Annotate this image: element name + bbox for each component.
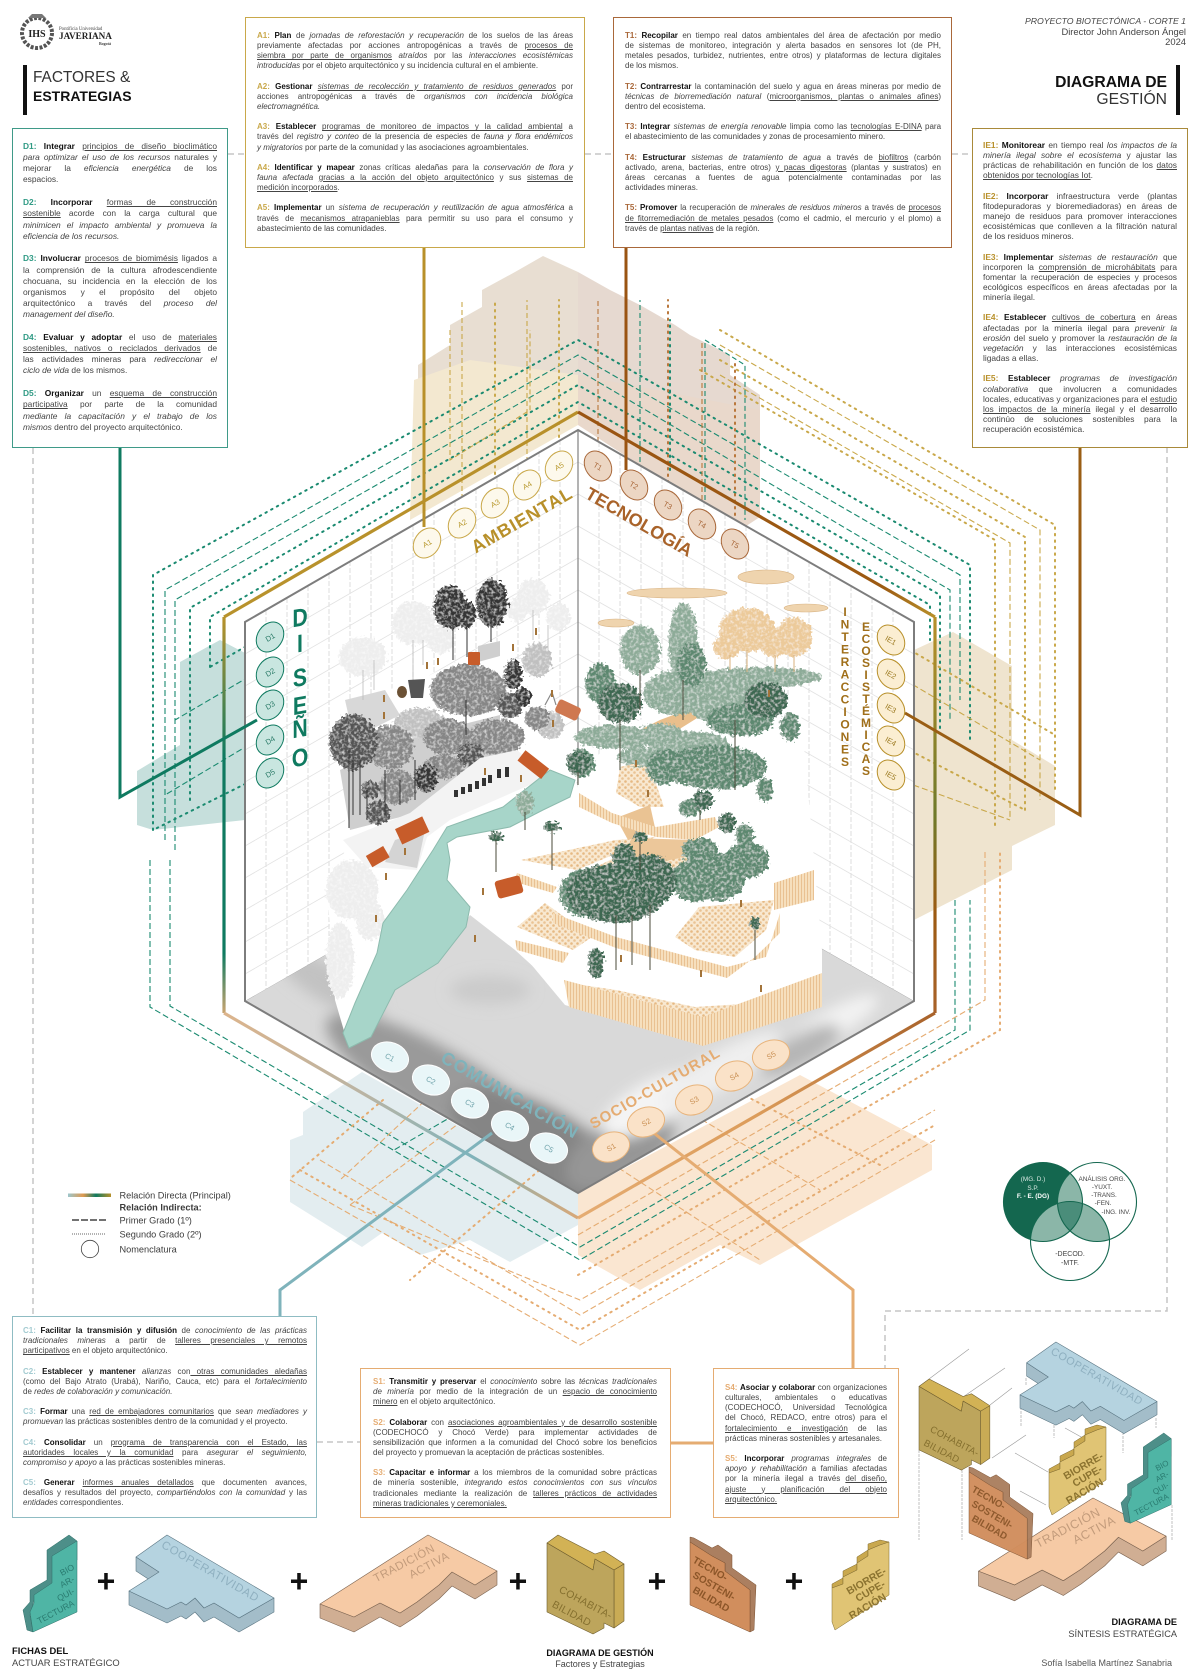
nomenclature nodes: diseño (251, 617, 289, 793)
nomenclature nodes: ambiental: A4 (521, 479, 533, 492)
strategic pieces row: bio-arquitectura: AR- (58, 1574, 76, 1590)
project header: PROYECTO BIOTECTÓNICA - CORTE 1 (1025, 16, 1186, 26)
venn diagram: -MTF. (1061, 1260, 1079, 1267)
text: T1 to T5: metales pesados, turbidez, nutrientes, entre otros) y plataformas de lectura digitales (625, 51, 941, 60)
nomenclature nodes: interacciones ecosistémicas: IE2 (884, 668, 898, 681)
heading: factores y estrategias: ESTRATEGIAS (33, 88, 132, 104)
nomenclature nodes: tecnología: T1 (592, 460, 604, 473)
strategic pieces row: biorrecuperación: CUPE- (854, 1579, 888, 1605)
text: T1 to T5: través de plantas nativas de la región. (625, 224, 760, 233)
text: A1 to A5 (256, 31, 574, 233)
text: D1 to D5: D5: Organizar un esquema de construcción (23, 388, 217, 398)
nomenclature nodes: comunicación: C1 (383, 1051, 396, 1064)
text: D1 to D5: las actividades mineras para redireccionar el (23, 354, 217, 364)
plus sign: + (509, 1563, 527, 1599)
panel: ambiental strategies (245, 17, 585, 248)
panel: diseño strategies (12, 128, 228, 448)
text: IE1 to IE5: IE1: Monitorear en tiempo real los impactos de la (983, 140, 1177, 150)
synthesis diagram: cohabitabilidad (919, 1379, 990, 1470)
text: C1 to C5: desafíos y resultados del proyecto, compartiéndolos con la comunidad y las (23, 1488, 307, 1497)
text: A1 to A5: A2: Gestionar sistemas de recolección y tratamiento de residuos generados por (257, 82, 573, 91)
text: A1 to A5: siembra por parte de organismos atraídos por las interacciones ecosistémicas (257, 51, 573, 60)
text: IE1 to IE5: manejo de residuos para promover interacciones (983, 211, 1177, 221)
factor label: diseño: D (292, 602, 308, 633)
panel: socio-cultural strategies S1 to S3 (360, 1368, 671, 1518)
factor label: diseño: O (292, 742, 308, 773)
factor label: diseño: E (293, 690, 307, 721)
synthesis diagram: tradición activa: ACTIVA (1070, 1513, 1118, 1547)
nomenclature nodes: diseño: D3 (264, 699, 277, 712)
text: S1 to S3 (373, 1377, 657, 1508)
text: D1 to D5: chocuana, su incidencia en la elección de los (23, 276, 217, 286)
nomenclature nodes: tecnología: T4 (696, 518, 708, 531)
project header (1025, 16, 1186, 47)
factor label: comunicación: COMUNICACIÓN (437, 1046, 583, 1143)
heading: diagrama de gestión (1040, 65, 1180, 115)
text: D1 to D5: para optimizar el uso de los recursos naturales y (23, 152, 217, 162)
text: T1 to T5: el abastecimiento de las comunidades y zonas de procesamiento minero. (625, 132, 885, 141)
synthesis diagram: tecnosostenibilidad: SOSTENI- (969, 1499, 1015, 1531)
outer hexagon: coloured factor frame (224, 412, 935, 1218)
text: D1 to D5: sostenible acorde con la carga cultural que (23, 208, 217, 218)
strategic pieces row: cooperatividad: COOPERATIVIDAD (159, 1539, 261, 1605)
text: IE1 to IE5: continúo de soluciones sostenibles para la (983, 414, 1177, 424)
text: T1 to T5: técnicas de biorremediación natural (microorganismos, plantas o animales afines) (625, 92, 941, 101)
floor: aerial landscape photo (246, 915, 913, 1192)
illustration: green forest (489, 603, 822, 978)
text: S1 to S3: (CODECHOCÓ y Chocó Verde) para implementar actividades de (373, 1428, 657, 1437)
nomenclature nodes: diseño: D1 (264, 631, 277, 644)
text: D1 to D5: ciclo de vida de los mismos. (23, 365, 127, 375)
nomenclature nodes: comunicación: C3 (463, 1097, 476, 1110)
caption: diagrama de síntesis estratégica: SÍNTESIS ESTRATÉGICA (1068, 1629, 1177, 1639)
factor label: socio-cultural: SOCIO-CULTURAL (587, 1044, 724, 1133)
venn diagram: -DECOD. (1055, 1251, 1085, 1258)
text: C1 to C5: C4: Consolidar un programa de transparencia con el Estado, las (23, 1438, 307, 1447)
factor label: ecosistémicas: ECOSISTÉMICAS (861, 620, 871, 778)
text: S4 and S5: fortalecimiento e investigación de las (725, 1424, 887, 1433)
text: C1 to C5: participativos en el objeto arquitectónico. (23, 1346, 168, 1355)
text: S4 and S5: arquitectónico. (725, 1495, 777, 1504)
text: IE1 to IE5: obtenidos por tecnologías Iot. (983, 170, 1093, 180)
caption: diagrama de síntesis estratégica: DIAGRAMA DE (1111, 1617, 1177, 1627)
venn diagram: ANÁLISIS ORG. (1079, 1174, 1126, 1183)
text: D1 to D5: la comprensión de la cultura afrodescendiente (23, 265, 217, 275)
text: IE1 to IE5: fitodepuradoras y bioremediadoras) en áreas de (983, 201, 1177, 211)
text: A1 to A5: electromagnética. (257, 102, 320, 111)
synthesis diagram: cohabitabilidad: BILIDAD (922, 1438, 961, 1466)
text: A1 to A5: A4: Identificar y mapear zonas críticas aledañas para la conservación de flora y (257, 163, 573, 172)
text: IE1 to IE5: IE4: Establecer cultivos de cobertura en áreas (983, 312, 1177, 322)
text: S4 and S5: S4: Asociar y colaborar con organizaciones (725, 1383, 887, 1392)
illustration: right terraces (515, 703, 822, 1046)
strategic pieces row: cohabitabilidad (547, 1535, 624, 1634)
text: IE1 to IE5: locales, educativas y organizaciones para el estudio (983, 394, 1177, 404)
factor label: interacciones: INTERACCIONES (840, 605, 850, 769)
factor label: diseño: S (293, 662, 307, 693)
nomenclature nodes: ambiental (408, 446, 578, 563)
synthesis diagram: tecnosostenibilidad: BILIDAD (969, 1513, 1009, 1543)
plus sign: + (648, 1563, 666, 1599)
text: T1 to T5: actividades mineras. (625, 183, 698, 192)
text: IE1 to IE5: ligadas a ellas. (983, 353, 1038, 363)
text: T1 to T5: T4: Estructurar sistemas de tratamiento de agua a través de biofiltros (carbón (625, 153, 941, 162)
text: A1 to A5: acciones antropogénicas a través de organismos con incidencia biológica (257, 92, 573, 101)
text: T1 to T5: T2: Contrarrestar la contaminación del suelo y agua en áreas mineras por medio de (625, 82, 941, 91)
venn diagram: F. - E. (DG) (1017, 1193, 1049, 1200)
heading: diagrama de gestión: GESTIÓN (1096, 91, 1167, 108)
logo: Pontificia Universidad Javeriana: Pontificia Universidad (59, 27, 103, 32)
legend: Segundo Grado (2º) (120, 1230, 202, 1240)
venn diagram: -FEN. (1095, 1200, 1112, 1207)
credit: author: Sofía Isabella Martínez Sanabria (1041, 1658, 1172, 1668)
caption: diagrama de gestión: Factores y Estrategias (555, 1659, 645, 1669)
text: IE1 to IE5: incorporen la comprensión de microhábitats para (983, 262, 1177, 272)
text: T1 to T5: de fitorremediación de metales pesados (como el cadmio, el mercurio y el plomo) a (625, 214, 941, 223)
nomenclature nodes: interacciones ecosistémicas: IE1 (884, 634, 898, 647)
text: S1 to S3: sensibilización que informen a la comunidad del Chocó sobre los beneficios (373, 1438, 657, 1447)
strategic pieces row: cohabitabilidad: BILIDAD (550, 1599, 593, 1629)
illustration: white ground under the landscape (328, 650, 822, 1048)
text: S1 to S3: del proyecto y promuevan la aceptación de prácticas sostenibles. (373, 1448, 604, 1457)
venn diagram: S.P. (1027, 1185, 1039, 1192)
nomenclature nodes: socio-cultural: S1 (605, 1141, 617, 1154)
caption: diagrama de gestión: DIAGRAMA DE GESTIÓN (546, 1648, 654, 1658)
text: T1 to T5: activado, arena, bacterias, entre otros) y pacas digestoras (plantas y sustratos) en (625, 163, 941, 172)
legend: Nomenclatura (120, 1244, 178, 1254)
strategic pieces row: bio-arquitectura: QUI- (55, 1586, 76, 1603)
nomenclature nodes: interacciones ecosistémicas: IE4 (884, 735, 898, 748)
text: S1 to S3: de minería por medio de la integración de un espacio de conocimiento (373, 1387, 657, 1396)
panel: interacciones ecosistémicas strategies (972, 128, 1188, 448)
text: S1 to S3: de minería sostenible, integrando estos conocimientos con sus vínculos (373, 1478, 657, 1487)
isometric room: walls and grid (245, 430, 914, 1193)
text: T1 to T5: de los mismos. (625, 61, 678, 70)
text: A1 to A5: A1: Plan de jornadas de reforestación y recuperación de los suelos de las áreas (257, 31, 573, 40)
text: IE1 to IE5: minería ilegal sobre el ecosistema y ajustar las (983, 150, 1177, 160)
synthesis diagram: biorrecuperación: CUPE- (1071, 1464, 1105, 1490)
factor label: diseño (292, 602, 308, 773)
synthesis diagram: cooperatividad: COOPERATIVIDAD (1048, 1346, 1145, 1408)
text: C1 to C5: tradicionales mineras a partir de talleres presenciales y remotos (23, 1336, 307, 1345)
direct relation connectors (120, 247, 1080, 1443)
nomenclature nodes: interacciones ecosistémicas: IE5 (884, 769, 898, 782)
strategic pieces row: bio-arquitectura: TECTURA (35, 1598, 76, 1626)
factor label: ambiental: AMBIENTAL (468, 483, 576, 557)
strategic pieces row: cooperatividad (129, 1535, 274, 1632)
text: D1 to D5: arquitectónico a través del proceso del (23, 298, 217, 308)
panel: tecnología strategies (613, 17, 952, 248)
text: IE1 to IE5: IE2: Incorporar infraestructura verde (plantas (983, 191, 1177, 201)
volume: socio-cultural extrusion (578, 1075, 932, 1290)
nomenclature nodes: tecnología: T3 (662, 499, 674, 512)
text: A1 to A5: y migratorios por parte de la comunidad y las asociaciones agroambientales. (257, 143, 529, 152)
strategic pieces row: tradición activa: TRADICIÓN (371, 1542, 437, 1585)
illustration: teal river (343, 770, 575, 1048)
nomenclature nodes: interacciones ecosistémicas: IE3 (884, 702, 898, 715)
synthesis diagram: bio-arquitectura: QUI- (1151, 1481, 1171, 1497)
text: S1 to S3: S3: Capacitar e informar a los miembros de la comunidad sobre prácticas (373, 1468, 657, 1477)
text: A1 to A5: introducidas por el objeto arquitectónico y su incidencia cultural en el ambiente. (257, 61, 538, 70)
nomenclature nodes: comunicación: C5 (542, 1142, 555, 1155)
nomenclature nodes: socio-cultural: S2 (640, 1116, 652, 1129)
synthesis diagram: tecnosostenibilidad (969, 1467, 1033, 1559)
text: C1 to C5 (22, 1326, 308, 1507)
nomenclature nodes: comunicación: C4 (503, 1120, 516, 1133)
text: D1 to D5: minimicen el impacto ambiental y promueva la (23, 220, 217, 230)
caption: diagrama de gestión (546, 1648, 654, 1669)
heading: diagrama de gestión: DIAGRAMA DE (1055, 74, 1167, 91)
text: C1 to C5: C5: Generar informes anuales detallados que documenten avances, (23, 1478, 307, 1487)
volumes: ambiental and tecnología extrusions (410, 256, 760, 530)
logo: Pontificia Universidad Javeriana: JAVERIANA (59, 31, 112, 41)
text: D1 to D5: participativa por parte de la comunidad (23, 399, 217, 409)
indirect relation lines: first and second degree (33, 154, 1167, 1443)
text: D1 to D5: D2: Incorporar formas de construcción (23, 197, 217, 207)
project header: 2024 (1165, 36, 1186, 47)
text: S1 to S3: mineras tradicionales y ceremoniales. (373, 1499, 507, 1508)
text: IE1 to IE5: IE3: Implementar sistemas de restauración que (983, 252, 1177, 262)
plus sign: + (785, 1563, 803, 1599)
strategic pieces row: bio-arquitectura: BIO (58, 1562, 76, 1578)
text: D1 to D5: mismos dentro del proyecto arquitectónico. (23, 422, 183, 432)
nomenclature nodes: ambiental: A1 (421, 537, 433, 550)
venn diagram: (MG. D.) (1021, 1176, 1045, 1183)
illustration: mining machinery (366, 652, 582, 899)
logo: Pontificia Universidad Javeriana (22, 14, 112, 48)
text: IE1 to IE5: IE5: Establecer programas de investigación (983, 373, 1177, 383)
text: D1 to D5: D3: Involucrar procesos de biomimésis ligados a (23, 253, 217, 263)
heading: factores y estrategias (23, 65, 143, 115)
project header: Director John Anderson Ángel (1061, 26, 1186, 37)
legend (68, 1190, 231, 1258)
text: S4 and S5: apoyo y rehabilitación a familias afectadas (725, 1464, 887, 1473)
text: T1 to T5: T5: Promover la recuperación de minerales de residuos mineros a través de procesos (625, 203, 941, 212)
text: D1 to D5 (22, 141, 218, 432)
nomenclature nodes: tecnología: T5 (729, 538, 741, 551)
strategic pieces row: tecnosostenibilidad (690, 1537, 756, 1632)
text: S1 to S3: minero en el objeto arquitectónico. (373, 1397, 495, 1406)
text: T1 to T5: de sistemas de monitoreo, integración y alerta basados en sensores Iot (de PH, (625, 41, 941, 50)
text: S1 to S3: S1: Transmitir y preservar el conocimiento sobre las técnicas tradicionales (373, 1377, 657, 1386)
venn diagram: -TRANS. (1091, 1192, 1117, 1199)
text: D1 to D5: D4: Evaluar y adoptar el uso de materiales (23, 332, 217, 342)
text: A1 to A5: medición incorporados. (257, 183, 340, 192)
synthesis diagram: tradición activa: TRADICIÓN (1032, 1504, 1103, 1551)
caption: fichas del actuar estratégico (12, 1645, 120, 1668)
text: T1 to T5: áreas cercanas a fuentes de agua potencialmente contaminadas por las (625, 173, 941, 182)
text: T1 to T5: T3: Integrar sistemas de energía renovable limpia como las tecnologías E-DINA para (625, 122, 941, 131)
text: A1 to A5: través de mecanismos atrapanieblas para permitir su uso para el consumo y (257, 214, 573, 223)
volume: interacciones extrusion (914, 632, 1055, 920)
synthesis diagram: bio-arquitectura: BIO (1154, 1458, 1170, 1473)
text: IE1 to IE5: ecosistémicas que conlleven a la filtración natural (983, 221, 1177, 231)
text: C1 to C5: compromiso y apoyo a las prácticas sostenibles mineras. (23, 1458, 225, 1467)
strategic pieces row: tradición activa (320, 1535, 497, 1632)
nomenclature nodes: tecnología (579, 446, 754, 564)
text: A1 to A5: través del registro y conteo de la presencia de especies de fauna y flora endémicos (257, 132, 573, 141)
text: C1 to C5: promuevan las prácticas sostenibles dentro de la comunidad y el proyecto. (23, 1417, 288, 1426)
nomenclature nodes: socio-cultural: S5 (765, 1049, 777, 1062)
text: IE1 to IE5: los impactos de la minería ilegal y el desarrollo (983, 404, 1177, 414)
strategic pieces row: cohabitabilidad: COHABITA- (557, 1585, 614, 1622)
synthesis diagram: bio-arquitectura: AR- (1154, 1469, 1171, 1484)
text: S4 and S5: del Chocó, REDACO, entre otros) para el (725, 1413, 887, 1422)
volume: comunicación extrusion (290, 1072, 578, 1262)
text: D1 to D5: mejorar la eficiencia energética de los (23, 163, 217, 173)
text: D1 to D5: espacios. (23, 174, 58, 184)
factor label: diseño: I (297, 629, 303, 658)
text: S1 to S3: tradicionales mediante la realización de talleres prácticos de actividades (373, 1489, 657, 1498)
venn diagram: -YUXT. (1092, 1184, 1112, 1191)
nomenclature nodes: comunicación (367, 1037, 572, 1168)
text: C1 to C5: de redes de colaboración y comunicación. (23, 1387, 172, 1396)
text: C1 to C5: (como del Bajo Atrato (Urabá), Nariño, Cauca, etc) para el fortalecimiento (23, 1377, 307, 1386)
text: S1 to S3: S2: Colaborar con asociaciones agroambientales y de desarrollo sostenible (373, 1418, 657, 1427)
illustration: peach trees and clouds (598, 570, 828, 672)
strategic pieces row: biorrecuperación: BIORRE- (845, 1566, 889, 1598)
text: A1 to A5: abastecimiento de las comunidades. (257, 224, 386, 233)
text: IE1 to IE5: de los residuos mineros. (983, 231, 1074, 241)
synthesis diagram: bio-arquitectura: TECTURA (1133, 1492, 1171, 1518)
text: A1 to A5: A3: Establecer programas de monitoreo de impactos y la calidad ambiental a (257, 122, 573, 131)
strategic pieces row: tecnosostenibilidad: SOSTENI- (690, 1570, 737, 1603)
logo: Pontificia Universidad Javeriana: IHS (28, 29, 46, 40)
venn diagram: -ING. INV. (1102, 1209, 1131, 1216)
text: IE1 to IE5: prácticas de rehabilitación en función de los datos (983, 160, 1177, 170)
nomenclature nodes: socio-cultural: S3 (688, 1094, 700, 1107)
text: S4 and S5: ajuste y planificación del objeto (725, 1484, 887, 1494)
text: A1 to A5: A5: Implementar un sistema de recuperación y reutilización de agua atmosférica a (257, 203, 573, 212)
text: D1 to D5: D1: Integrar principios de diseño bioclimático (23, 141, 217, 151)
text: IE1 to IE5: afectadas por la minería ilegal para prevenir la (983, 323, 1177, 333)
caption: diagrama de síntesis estratégica (1068, 1617, 1177, 1639)
text: IE1 to IE5: vegetación y las interacciones ecosistémicas (983, 343, 1177, 353)
nomenclature nodes: interacciones ecosistémicas (872, 620, 910, 795)
nomenclature nodes: diseño: D4 (264, 734, 277, 747)
text: IE1 to IE5: minería ilegal. (983, 292, 1035, 302)
plus sign: + (290, 1563, 308, 1599)
synthesis diagram: bio-arquitectura (1121, 1433, 1171, 1523)
text: T1 to T5: T1: Recopilar en tiempo real datos ambientales del área de afectación por medio (625, 31, 941, 40)
text: IE1 to IE5: colaborativa que involucren a comunidades (983, 384, 1177, 394)
synthesis diagram: biorrecuperación: BIORRE- (1062, 1451, 1106, 1483)
text: S4 and S5 (725, 1383, 887, 1504)
legend: Relación Directa (Principal) (120, 1190, 231, 1200)
text: D1 to D5: management del diseño. (23, 309, 115, 319)
synthesis diagram: tradición activa (979, 1498, 1166, 1601)
panel: comunicación strategies (12, 1316, 317, 1518)
panel: socio-cultural strategies S4 and S5 (713, 1368, 899, 1518)
text: D1 to D5: organismos y el propósito del objeto (23, 287, 217, 297)
text: A1 to A5: fauna afectada gracias a la acción del objeto arquitectónico y sus sistemas de (257, 173, 573, 182)
text: T1 to T5: dentro del ecosistema. (625, 102, 706, 111)
text: S4 and S5: (CODECHOCÓ, Universidad Tecnológica (725, 1403, 887, 1412)
strategic pieces row: biorrecuperación: RACIÓN (847, 1590, 888, 1622)
synthesis diagram: cooperatividad (1020, 1342, 1157, 1434)
nomenclature nodes: ambiental: A2 (456, 517, 468, 530)
illustration: left hillside with grey forest (326, 579, 570, 998)
synthesis diagram: biorrecuperación: RACIÓN (1064, 1475, 1106, 1507)
legend: Primer Grado (1º) (120, 1216, 192, 1226)
nomenclature nodes: ambiental: A3 (489, 497, 501, 510)
synthesis diagram: cohabitabilidad: COHABITA- (928, 1424, 981, 1459)
strategic pieces row: tradición activa: ACTIVA (407, 1550, 452, 1581)
synthesis diagram: biorrecuperación (1049, 1425, 1106, 1515)
text: A1 to A5: previamente afectadas por acciones antropogénicas a través de procesos de (257, 41, 573, 50)
strategic pieces row: tecnosostenibilidad: TECNO- (690, 1555, 729, 1584)
text: C1 to C5: C3: Formar una red de embajadores comunitarios que sean mediadores y (23, 1407, 307, 1416)
text: S4 and S5: por la minería ilegal a través del diseño, (725, 1474, 887, 1483)
text: C1 to C5: C2: Establecer y mantener alianzas con otras comunidades aledañas (23, 1367, 307, 1376)
text: C1 to C5: autoridades locales y la comunidad para asegurar el seguimiento, (23, 1448, 307, 1457)
factor label: tecnología: TECNOLOGÍA (582, 482, 696, 561)
nomenclature nodes: socio-cultural (588, 1035, 794, 1167)
text: T1 to T5 (625, 31, 942, 233)
factor label: diseño: Ñ (292, 712, 308, 744)
text: S4 and S5: prácticas mineras sostenibles y artesanales. (725, 1434, 882, 1443)
text: D1 to D5: sostenibles, nativos o reciclados derivados de (23, 343, 217, 353)
text: S4 and S5: S5: Incorporar programas integrales de (725, 1454, 887, 1463)
text: C1 to C5: C1: Facilitar la transmisión y difusión de conocimiento de las prácticas (23, 1326, 307, 1335)
nomenclature nodes: tecnología: T2 (628, 479, 640, 492)
synthesis guide lines (919, 1349, 1172, 1540)
nomenclature nodes: diseño: D2 (264, 666, 277, 679)
caption: fichas del actuar estratégico: ACTUAR ESTRATÉGICO (12, 1657, 120, 1668)
text: IE1 to IE5: fomentar la recuperación de especies y procesos (983, 272, 1177, 282)
venn diagram (1004, 1162, 1136, 1280)
nomenclature nodes: diseño: D5 (264, 767, 277, 780)
text: IE1 to IE5: erosión del suelo y promover la restauración de la (983, 333, 1177, 343)
site workers (375, 628, 770, 992)
strategic pieces row: biorrecuperación (832, 1540, 889, 1630)
text: IE1 to IE5: ecológicos específicos en áreas afectadas por la (983, 282, 1177, 292)
strategic pieces row: bio-arquitectura (23, 1535, 77, 1632)
text: S4 and S5: culturales, ambientales o educativas (725, 1393, 887, 1402)
nomenclature nodes: ambiental: A5 (553, 460, 565, 473)
nomenclature nodes: socio-cultural: S4 (728, 1070, 740, 1083)
volume: diseño extrusion (137, 640, 245, 830)
synthesis diagram: tecnosostenibilidad: TECNO- (969, 1484, 1007, 1512)
heading: factores y estrategias: FACTORES & (33, 69, 130, 86)
caption: fichas del actuar estratégico: FICHAS DEL (12, 1645, 68, 1656)
inner hexagon outline (245, 430, 914, 1193)
legend: Relación Indirecta: (120, 1202, 202, 1212)
plus sign: + (97, 1563, 115, 1599)
text: IE1 to IE5: recuperación ecosistémica. (983, 424, 1084, 434)
text: C1 to C5: entidades correspondientes. (23, 1498, 124, 1507)
logo: Pontificia Universidad Javeriana: Bogotá (99, 41, 111, 46)
text: IE1 to IE5 (983, 140, 1178, 434)
text: D1 to D5: mediante la capacitación y el trabajo de los (23, 410, 217, 420)
strategic pieces row: tecnosostenibilidad: BILIDAD (690, 1585, 731, 1615)
text: D1 to D5: eficiencia de los recursos. (23, 231, 119, 241)
nomenclature nodes: comunicación: C2 (424, 1074, 437, 1087)
